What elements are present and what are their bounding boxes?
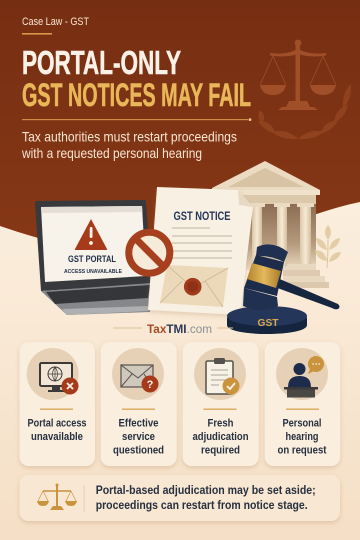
card rule (122, 408, 155, 410)
icon: prohibition sign (129, 232, 170, 273)
card rule (204, 408, 236, 410)
title divider (22, 118, 251, 121)
callout divider (83, 485, 86, 512)
watermark: scales of justice (258, 40, 351, 139)
eyebrow: case law: Case Law - GST (22, 16, 89, 28)
card label (278, 418, 327, 456)
callout text: proceedings can restart from notice stage. (96, 498, 308, 512)
subtitle: Tax authorities must restart proceedings (22, 128, 237, 144)
subtitle (21, 128, 237, 161)
card label: adjudication (192, 431, 249, 443)
icon: gold scales (37, 484, 77, 510)
illustration: notice document (148, 187, 253, 315)
card: fresh adjudication (183, 342, 259, 466)
illustration: gavel (227, 244, 340, 334)
laptop text: GST portal: GST PORTAL (68, 254, 116, 264)
document lines (172, 228, 232, 258)
envelope (160, 265, 228, 307)
card: effective service (101, 342, 177, 466)
icon: envelope with question: ? (147, 379, 154, 391)
icon: monitor with globe (40, 363, 78, 394)
brand: TaxTMI (113, 324, 233, 336)
card rule (40, 408, 73, 410)
laptop text: access unavailable: ACCESS UNAVAILABLE (64, 269, 122, 275)
callout text: Portal-based adjudication may be set aside; (96, 483, 316, 497)
icon: warning triangle (75, 219, 107, 250)
title (22, 44, 251, 113)
card rule (286, 408, 319, 410)
icon: speaker at podium (284, 356, 324, 398)
card label: questioned (113, 444, 164, 456)
card label: Effective (118, 418, 158, 430)
card label: unavailable (31, 431, 83, 443)
card label: service (122, 431, 155, 443)
callout text (96, 483, 316, 512)
card label: Personal (282, 418, 322, 430)
icon: clipboard with check (206, 358, 240, 394)
illustration: courthouse (212, 161, 329, 288)
subtitle: with a requested personal hearing (21, 145, 202, 161)
card label: required (201, 444, 240, 456)
card label: Fresh (208, 418, 234, 430)
title line 1: PORTAL-ONLY (22, 44, 181, 81)
card: portal access (20, 342, 95, 466)
card label (113, 418, 164, 456)
gavel base label: GST (258, 318, 278, 329)
card label: on request (278, 444, 327, 456)
illustration: laptop (35, 200, 152, 315)
card label: Portal access (28, 418, 86, 430)
card label (192, 418, 249, 456)
illustration: olive branch (315, 225, 341, 268)
document heading: GST NOTICE (174, 211, 231, 223)
eyebrow underline (22, 33, 52, 35)
card label: hearing (286, 431, 318, 443)
card: personal hearing (265, 342, 340, 466)
callout bar (20, 475, 340, 521)
card label (28, 418, 86, 443)
brand: TaxTMI: TaxTMI.com (147, 324, 212, 336)
